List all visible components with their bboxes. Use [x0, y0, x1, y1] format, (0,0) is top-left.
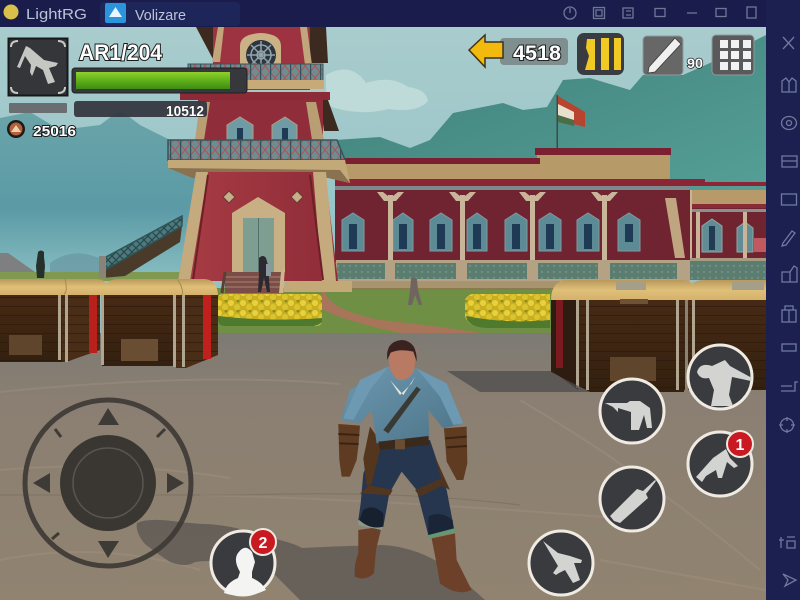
flower beds [218, 294, 550, 328]
icon: panel [782, 156, 797, 167]
icon: box [782, 306, 796, 322]
flag [556, 95, 585, 148]
right wing [622, 190, 766, 282]
ground shadows [137, 371, 590, 600]
top storey [180, 27, 330, 100]
ground plaza [0, 333, 770, 600]
background: sky and mountains [0, 27, 770, 337]
balustrade [336, 260, 690, 288]
icon: folder [782, 266, 797, 282]
app name: LightRG [26, 6, 87, 23]
window controls [564, 7, 793, 19]
tab title: Volizare [135, 8, 186, 24]
icon: close [783, 37, 794, 49]
ammo count: 90 [687, 55, 703, 71]
action button: grapple [688, 345, 752, 409]
action button: soldier rifle [600, 379, 664, 443]
stat bars: 10512 [166, 103, 204, 120]
back arrow and score: 4518 [513, 42, 561, 65]
back arrow and score [469, 35, 568, 67]
menu grid button [712, 35, 754, 75]
weapon ammo text: AR1/204 [79, 40, 163, 65]
app logo [4, 4, 18, 20]
tower steps [222, 268, 352, 293]
pencil button [643, 36, 703, 75]
arms and gloves [338, 424, 360, 477]
background figures [36, 250, 422, 305]
icon: stand [781, 382, 798, 391]
tower staircase [99, 216, 183, 278]
holsters [360, 427, 393, 495]
icon: send [783, 574, 796, 586]
belt [378, 436, 429, 450]
neck and head [387, 347, 417, 380]
icon: target [779, 417, 795, 433]
coin counter: 25016 [33, 123, 76, 140]
health bar [72, 68, 247, 93]
treasure chests right [551, 280, 766, 392]
main building [335, 148, 766, 288]
icon: disc [782, 116, 796, 130]
badge 1: 1 [736, 437, 745, 454]
legs [358, 440, 454, 535]
icon: bag [782, 78, 796, 92]
right sidebar [766, 0, 800, 600]
stat bars [9, 101, 207, 120]
lawn and path [0, 272, 555, 333]
coin counter [7, 120, 76, 140]
icon: settings glyphs [779, 537, 795, 548]
middle storey [168, 100, 350, 183]
top title bar [0, 0, 800, 27]
tab icon [105, 3, 126, 23]
tower [168, 27, 352, 293]
treasure chests left [0, 279, 218, 368]
icon: rifle [17, 46, 58, 84]
action button: syringe [600, 467, 664, 531]
action button: profile with badge [211, 529, 276, 596]
torso [341, 367, 463, 443]
icon: rectangle [782, 344, 796, 351]
windows [342, 213, 640, 251]
main character [338, 340, 472, 592]
ground storey [178, 172, 338, 281]
badge 2: 2 [259, 535, 268, 552]
ammo button [577, 33, 624, 75]
action button: rifle [529, 531, 593, 595]
porch columns [377, 192, 618, 260]
icon: pencil [782, 231, 795, 246]
virtual joystick [25, 400, 191, 566]
weapon panel [8, 38, 68, 96]
boots [355, 527, 382, 579]
icon: window [782, 194, 796, 205]
action button: crouch with badge [688, 431, 753, 496]
fence [0, 253, 35, 272]
